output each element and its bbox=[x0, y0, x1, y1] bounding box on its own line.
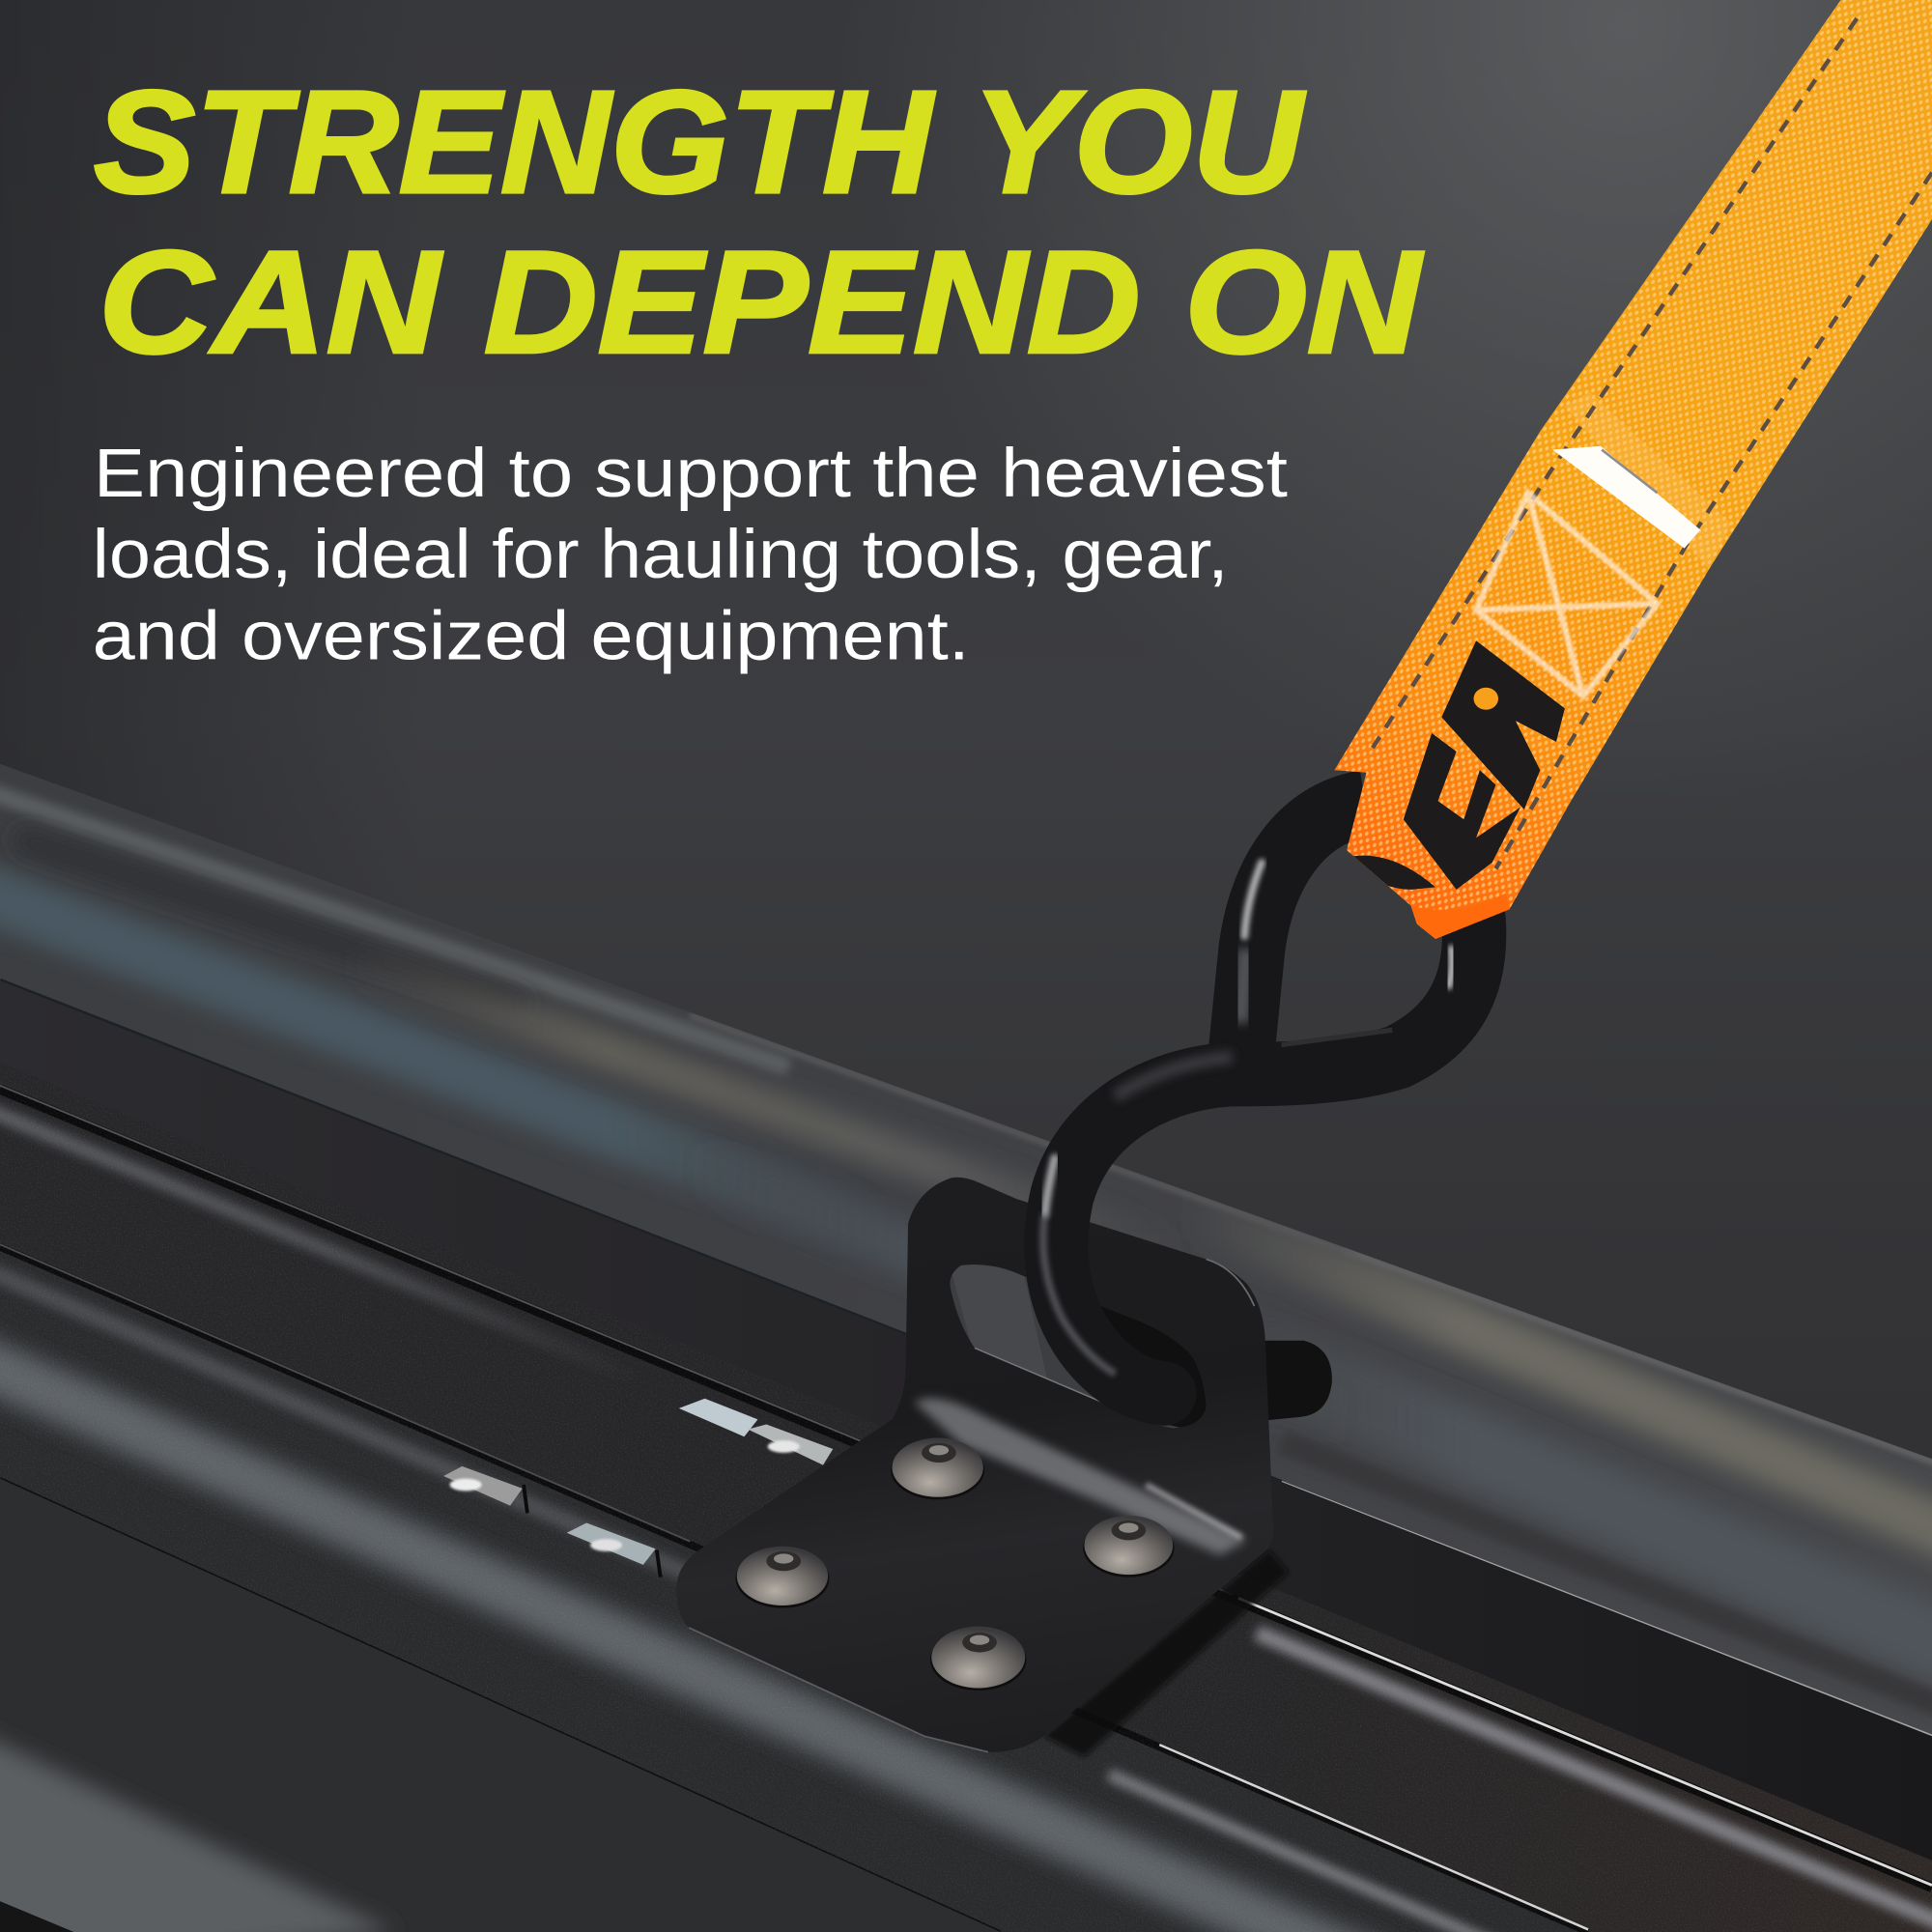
hook tip behind bracket bbox=[1263, 1341, 1332, 1421]
rubber seal strip bbox=[0, 764, 1932, 1736]
screw: right bbox=[1083, 1516, 1175, 1577]
hook highlights bbox=[1244, 863, 1262, 936]
body text: loads, ideal for hauling tools, gear, bbox=[93, 516, 1229, 593]
bracket bend sheen bbox=[914, 1399, 1247, 1555]
box-x stitch bbox=[1476, 493, 1658, 696]
screw: left bbox=[735, 1547, 829, 1608]
stitching bbox=[1373, 18, 1857, 748]
rail lower panel bbox=[0, 1479, 1001, 1932]
screw: bottom bbox=[930, 1627, 1026, 1690]
title bbox=[94, 61, 1424, 384]
strap fold shading bbox=[1565, 392, 1731, 569]
rail top surface bbox=[0, 1062, 1932, 1932]
black channel bbox=[0, 980, 1932, 1861]
white tape patch bbox=[1552, 446, 1700, 549]
rail front face bbox=[0, 1244, 1588, 1932]
s-hook bbox=[1043, 804, 1474, 1394]
body text bbox=[93, 435, 1288, 674]
slot bbox=[950, 1264, 1207, 1428]
body text: and oversized equipment. bbox=[93, 597, 970, 674]
title: STRENGTH YOU bbox=[94, 61, 1306, 224]
t-slot nuts bbox=[443, 1399, 833, 1577]
rolled bottom edge bbox=[1410, 894, 1509, 939]
title: CAN DEPEND ON bbox=[99, 221, 1424, 384]
bracket shadow on rail bbox=[1043, 1550, 1289, 1757]
woven logo bbox=[1351, 640, 1565, 890]
orange strap bbox=[1331, 0, 1932, 949]
mounting bracket bbox=[676, 1178, 1274, 1752]
screw: top bbox=[891, 1438, 984, 1499]
body text: Engineered to support the heaviest bbox=[94, 435, 1288, 512]
rail grain texture bbox=[0, 1060, 1932, 1932]
